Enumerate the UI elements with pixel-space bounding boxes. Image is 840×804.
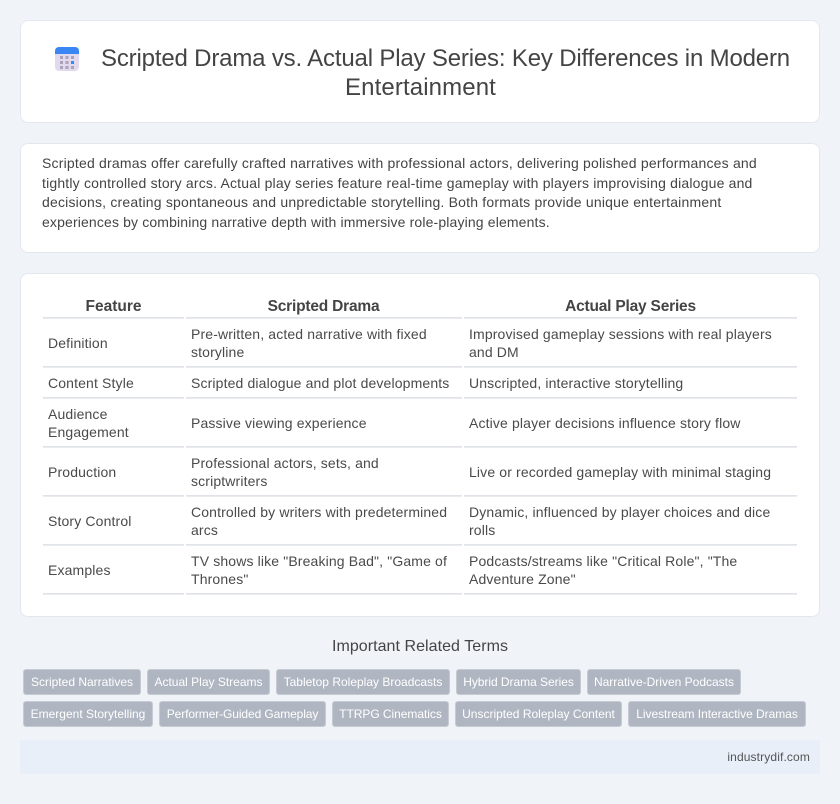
table rows: Audience <box>48 406 108 422</box>
table rows: Active player decisions influence story flow <box>469 415 741 431</box>
intro paragraph: experiences by combining narrative depth with immersive role-playing elements. <box>42 214 550 230</box>
table rows: Definition <box>48 335 108 351</box>
footer source: industrydif.com <box>727 750 810 764</box>
related terms heading: Important Related Terms <box>332 638 508 655</box>
table rows: rolls <box>469 522 495 538</box>
related terms tags: TTRPG Cinematics <box>339 707 442 721</box>
intro paragraph: tightly controlled story arcs. Actual play series feature real-time gameplay with players improvising dialogue and <box>42 174 753 190</box>
table rows: Pre-written, acted narrative with fixed <box>191 326 427 342</box>
table rows: Live or recorded gameplay with minimal staging <box>469 464 771 480</box>
related terms tags: Hybrid Drama Series <box>463 675 574 689</box>
comparison table card <box>20 273 820 617</box>
related terms tags: Narrative-Driven Podcasts <box>594 675 734 689</box>
table rows: TV shows like "Breaking Bad", "Game of <box>191 553 447 569</box>
title <box>101 45 790 101</box>
table rows: and DM <box>469 344 519 360</box>
table rows: Controlled by writers with predetermined <box>191 504 447 520</box>
table rows: Engagement <box>48 424 129 440</box>
footer bar <box>20 740 820 774</box>
table rows: Podcasts/streams like "Critical Role", "The <box>469 553 737 569</box>
table rows: Examples <box>48 562 111 578</box>
related terms tags: Scripted Narratives <box>31 675 133 689</box>
table rows: Thrones" <box>191 571 248 587</box>
intro paragraph <box>42 155 757 230</box>
related terms tags: Performer-Guided Gameplay <box>167 707 318 721</box>
table rows: Unscripted, interactive storytelling <box>469 375 683 391</box>
table rows: Dynamic, influenced by player choices and dice <box>469 504 770 520</box>
related terms tags: Actual Play Streams <box>154 675 263 689</box>
table header row: Feature <box>86 298 142 315</box>
table header row <box>86 298 696 315</box>
intro card <box>20 143 820 253</box>
table rows: Story Control <box>48 513 132 529</box>
table rows: Passive viewing experience <box>191 415 367 431</box>
title: Scripted Drama vs. Actual Play Series: Key Differences in Modern <box>101 45 790 72</box>
table rows: storyline <box>191 344 244 360</box>
table rows: Professional actors, sets, and <box>191 455 379 471</box>
icon: calendar <box>55 47 79 71</box>
table rows: Content Style <box>48 375 134 391</box>
intro paragraph: Scripted dramas offer carefully crafted narratives with professional actors, delivering polished performances and <box>42 155 757 171</box>
related terms tags: Tabletop Roleplay Broadcasts <box>284 675 442 689</box>
table rows: Improvised gameplay sessions with real players <box>469 326 772 342</box>
related terms tags: Livestream Interactive Dramas <box>636 707 798 721</box>
table rows: Scripted dialogue and plot developments <box>191 375 449 391</box>
table rows: scriptwriters <box>191 473 268 489</box>
intro paragraph: decisions, creating spontaneous and unpredictable storytelling. Both formats provide unique entertainment <box>42 194 721 210</box>
table header row: Scripted Drama <box>268 298 379 315</box>
table header row: Actual Play Series <box>565 298 696 315</box>
table rows: Production <box>48 464 116 480</box>
table rows: arcs <box>191 522 218 538</box>
related terms tags: Emergent Storytelling <box>31 707 145 721</box>
header card <box>20 20 820 123</box>
related terms tags: Unscripted Roleplay Content <box>462 707 615 721</box>
title: Entertainment <box>345 74 496 101</box>
table rows: Adventure Zone" <box>469 571 576 587</box>
